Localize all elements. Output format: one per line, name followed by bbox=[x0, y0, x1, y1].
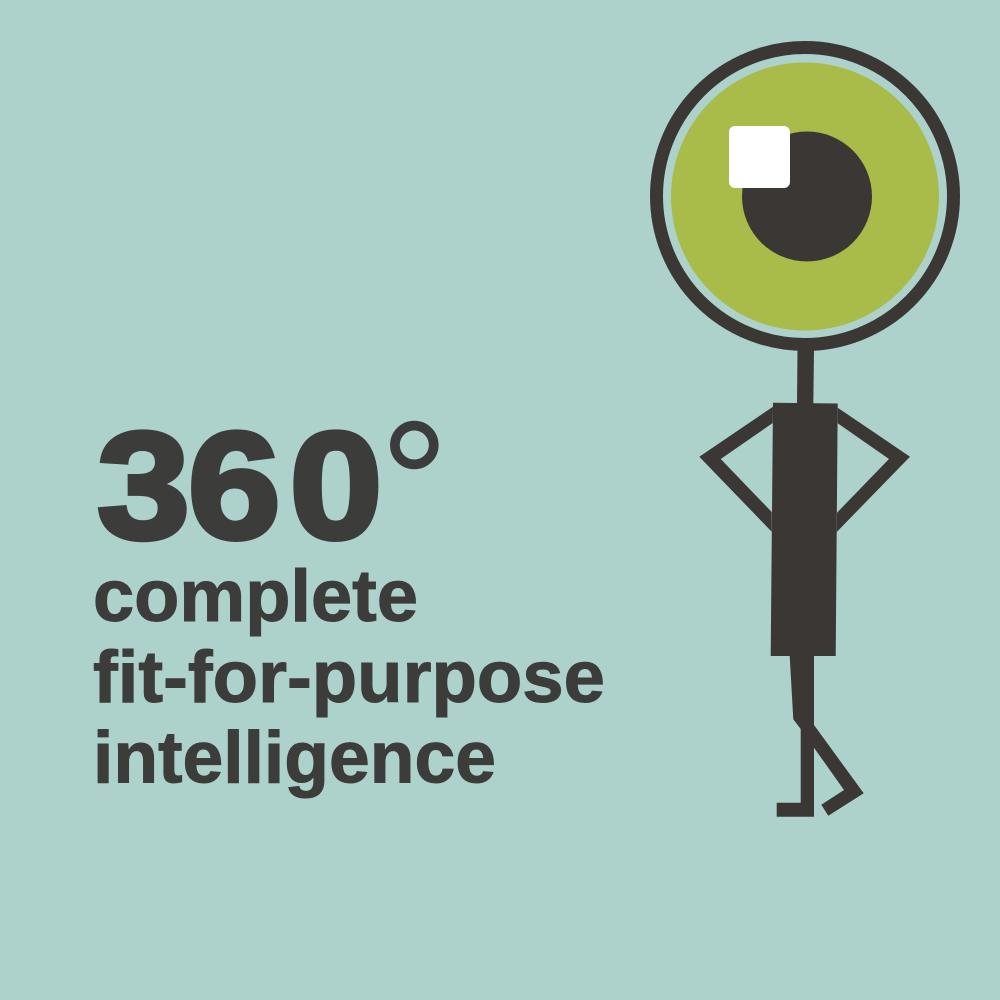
icon: eye head bbox=[656, 48, 954, 344]
neck bbox=[797, 350, 814, 405]
text line: fit-for-purpose: fit-for-purpose bbox=[93, 637, 605, 718]
text line: intelligence: intelligence bbox=[93, 718, 496, 798]
figure: eye-headed stick person bbox=[656, 48, 954, 817]
right arm bbox=[837, 408, 910, 532]
heading: 360: 360 bbox=[97, 400, 382, 570]
eye iris bbox=[671, 62, 939, 330]
heading: degree symbol bbox=[395, 426, 434, 464]
text line: complete: complete bbox=[93, 556, 418, 637]
eye highlight bbox=[729, 126, 790, 188]
torso bbox=[771, 403, 838, 656]
text block: headline and description bbox=[93, 400, 605, 798]
left arm bbox=[699, 407, 773, 532]
eye outer ring bbox=[656, 48, 954, 344]
eye pupil bbox=[742, 132, 872, 262]
legs bbox=[777, 656, 864, 817]
